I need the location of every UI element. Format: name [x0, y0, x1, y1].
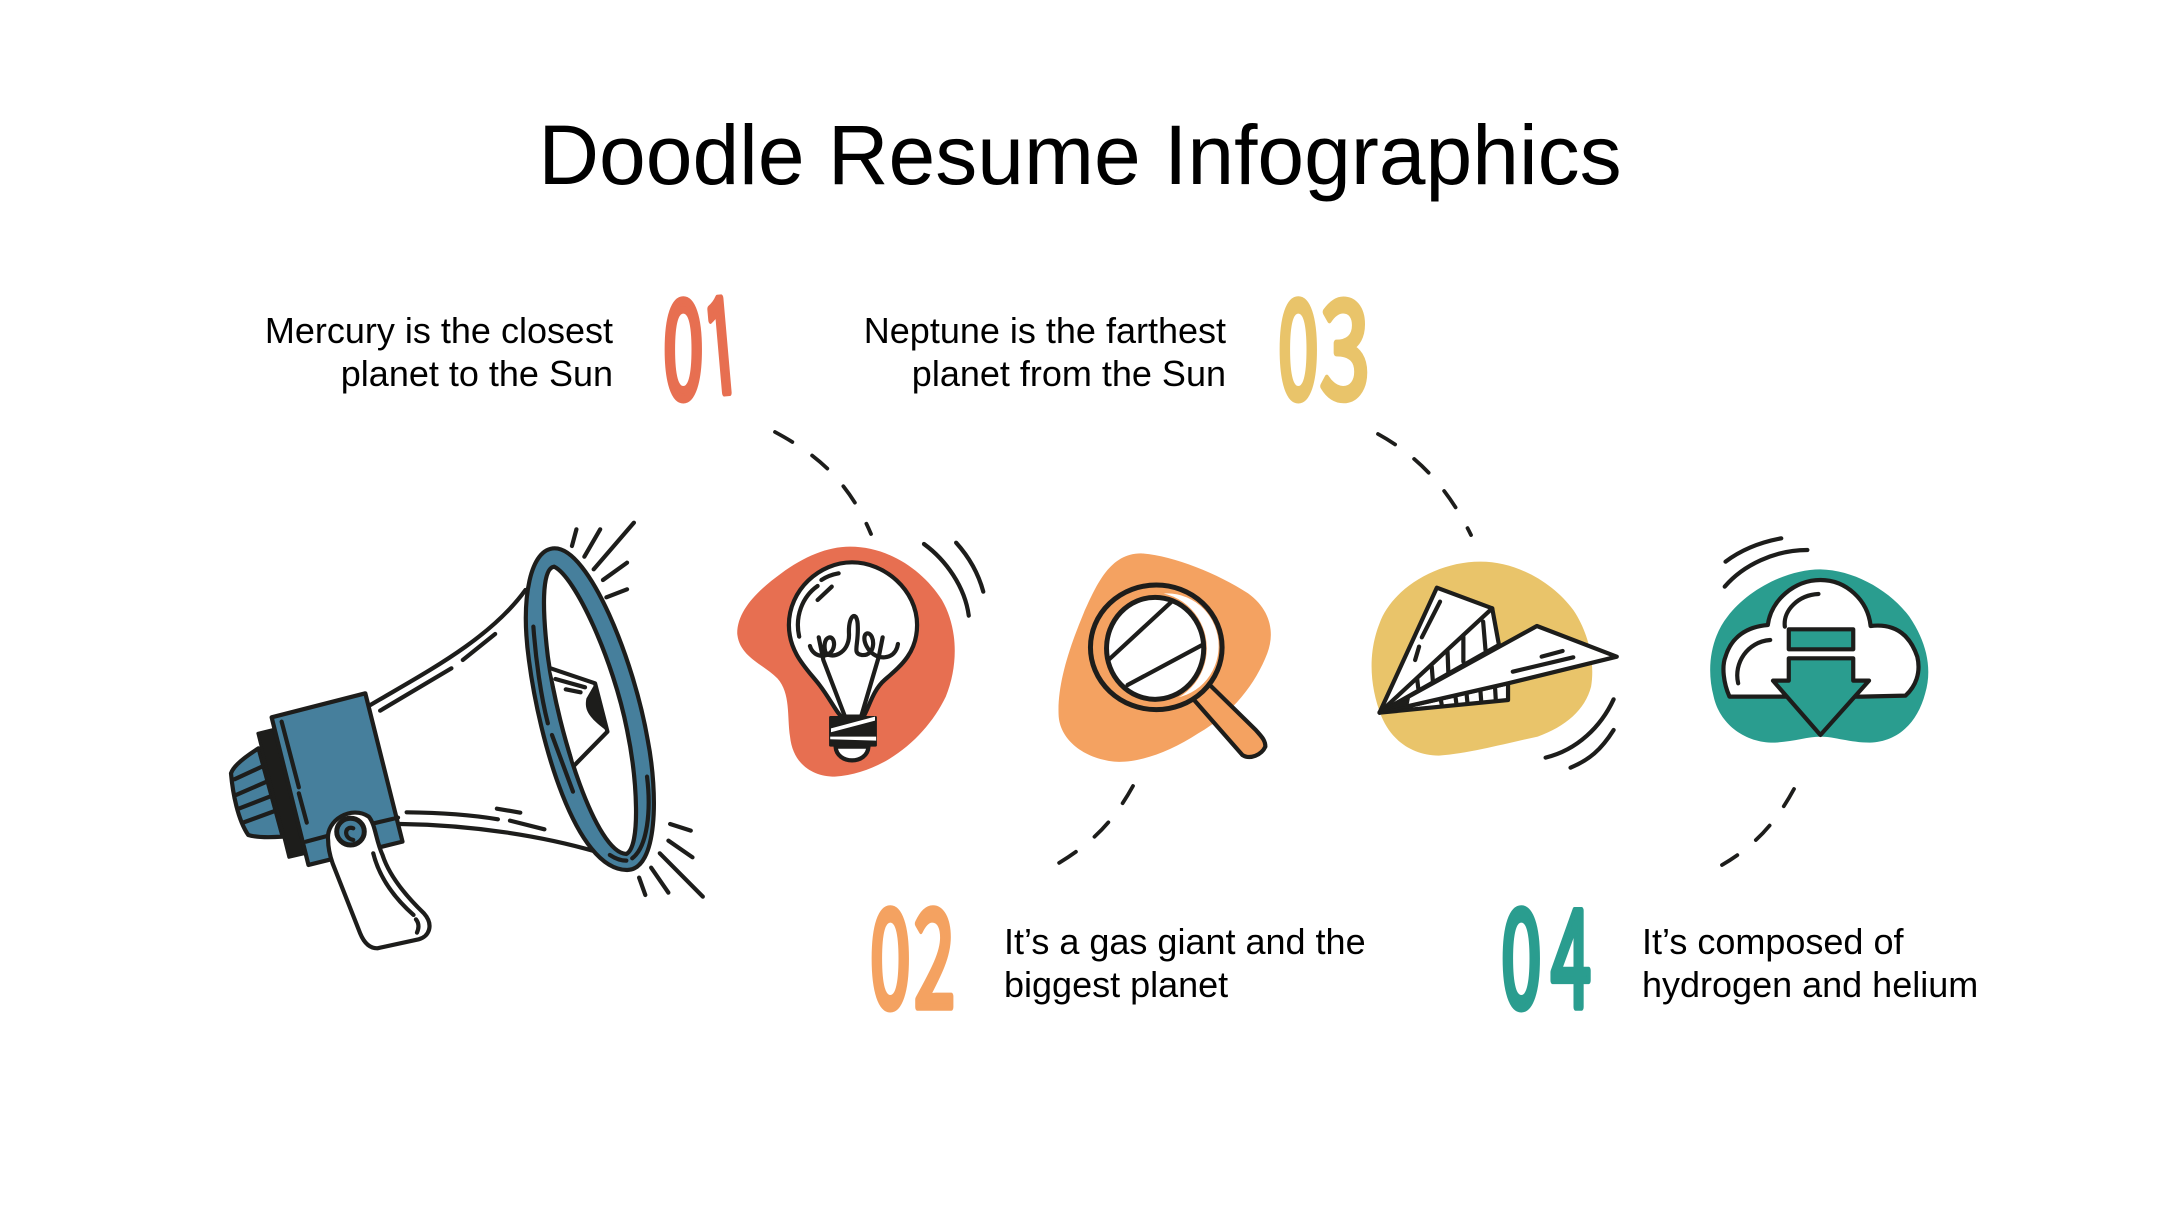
step 02 text: It’s a gas giant and the: [1004, 921, 1366, 962]
step 04 number: 4: [1551, 852, 1591, 1047]
icon: light bulb on red blob: [737, 543, 983, 777]
step 01 number: 1: [699, 279, 745, 417]
step 01 text: planet to the Sun: [341, 353, 613, 394]
step 02 number: 2: [914, 852, 955, 1047]
step 03 number: 3: [1320, 243, 1370, 438]
icon: megaphone: [231, 523, 703, 948]
step 02 text: biggest planet: [1004, 964, 1228, 1005]
step 03 text: Neptune is the farthest: [864, 310, 1226, 351]
step 01 text: Mercury is the closest: [265, 310, 613, 351]
title: Doodle Resume Infographics: [538, 108, 1622, 202]
step 04 number: [1501, 852, 1591, 1047]
step 03 number: 0: [1278, 243, 1319, 438]
connector: 04 to cloud: [1722, 789, 1794, 865]
connector: 03 to plane: [1378, 434, 1471, 535]
step 04 text: It’s composed of: [1642, 921, 1904, 962]
step 03 text: planet from the Sun: [912, 353, 1226, 394]
connector: 01 to bulb: [775, 432, 871, 534]
icon: cloud download on teal blob: [1710, 538, 1928, 743]
icon: paper plane on yellow blob: [1372, 562, 1617, 768]
step 01 number: 0: [663, 243, 704, 438]
step 02 number: 0: [870, 852, 911, 1047]
step 04 number: 0: [1501, 852, 1542, 1047]
icon: magnifying glass on orange blob: [1058, 553, 1271, 762]
step 02 number: [870, 852, 955, 1047]
step 03 number: [1278, 243, 1370, 438]
step 04 text: hydrogen and helium: [1642, 964, 1978, 1005]
connector: 02 to magnifier: [1059, 786, 1133, 863]
step 01 number: [663, 243, 745, 438]
